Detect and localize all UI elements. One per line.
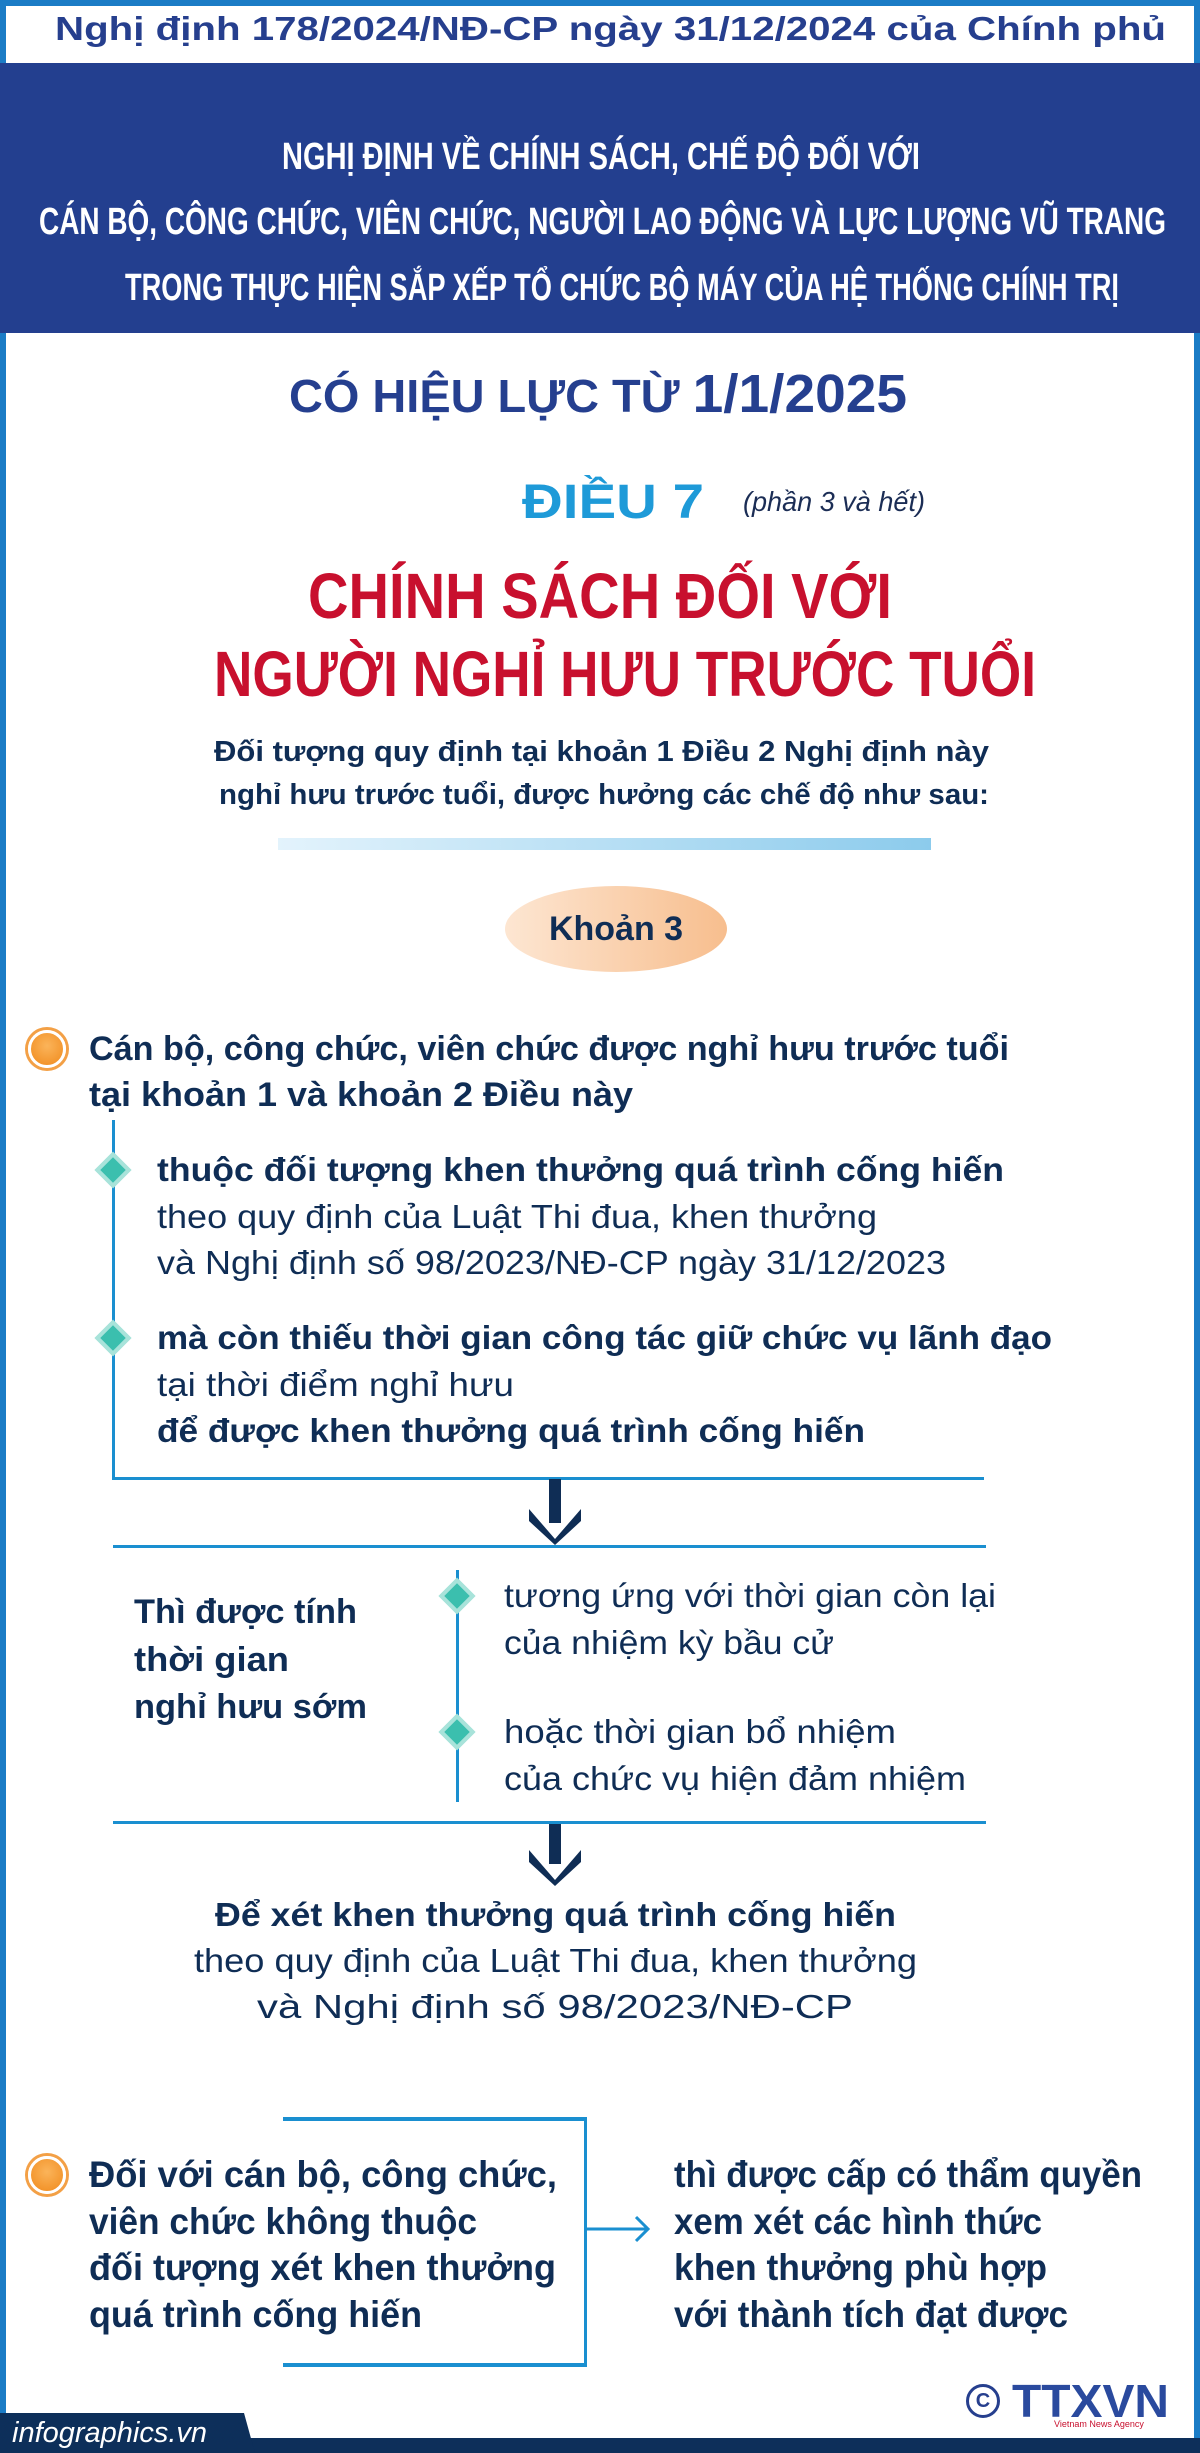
- bullet 2: [25, 2153, 557, 2335]
- effective date: CÓ HIỆU LỰC TỪ 1/1/2025: [289, 364, 907, 424]
- icon: orange dot: [28, 1030, 66, 1068]
- footer label: [0, 2413, 251, 2448]
- sub-item 1: và Nghị định số 98/2023/NĐ-CP ngày 31/12/2023: [157, 1244, 946, 1281]
- option 2: [438, 1713, 966, 1797]
- top title: Nghị định 178/2024/NĐ-CP ngày 31/12/2024 của Chính phủ: [55, 10, 1166, 47]
- header line 2: CÁN BỘ, CÔNG CHỨC, VIÊN CHỨC, NGƯỜI LAO ĐỘNG VÀ LỰC LƯỢNG VŨ TRANG: [39, 201, 1166, 243]
- result text: theo quy định của Luật Thi đua, khen thưởng: [194, 1942, 917, 1979]
- logo TTXVN: Vietnam News Agency: [1054, 2419, 1144, 2429]
- icon: diamond: [439, 1714, 475, 1750]
- option 2: của chức vụ hiện đảm nhiệm: [504, 1760, 966, 1797]
- result 2: xem xét các hình thức: [674, 2201, 1042, 2242]
- bullet 2: quá trình cống hiến: [89, 2294, 422, 2335]
- early retirement label: Thì được tính: [134, 1593, 357, 1631]
- footer bar: [0, 2438, 1200, 2453]
- intro text: nghỉ hưu trước tuổi, được hưởng các chế độ như sau:: [219, 779, 989, 811]
- red title: CHÍNH SÁCH ĐỐI VỚI: [308, 560, 892, 632]
- option 1: tương ứng với thời gian còn lại: [504, 1577, 996, 1614]
- bullet 1: [25, 1027, 1009, 1114]
- sub-item 1: thuộc đối tượng khen thưởng quá trình cống hiến: [157, 1151, 1004, 1188]
- result text: và Nghị định số 98/2023/NĐ-CP: [257, 1988, 853, 2025]
- bullet 2: viên chức không thuộc: [89, 2201, 477, 2242]
- gradient bar: [278, 838, 931, 850]
- bullet 2: đối tượng xét khen thưởng: [89, 2247, 556, 2288]
- arrow right: [587, 2216, 650, 2242]
- sub-item 2: mà còn thiếu thời gian công tác giữ chức vụ lãnh đạo: [157, 1319, 1052, 1356]
- option 1: [438, 1577, 996, 1661]
- result 2: [674, 2154, 1142, 2335]
- bullet 1: tại khoản 1 và khoản 2 Điều này: [89, 1076, 633, 1114]
- logo TTXVN: TTXVN: [1012, 2375, 1169, 2427]
- footer label: infographics.vn: [12, 2417, 207, 2449]
- icon: diamond: [95, 1320, 131, 1356]
- intro text: Đối tượng quy định tại khoản 1 Điều 2 Nghị định này: [214, 736, 989, 768]
- early retirement label: nghỉ hưu sớm: [134, 1688, 367, 1726]
- header line 3: TRONG THỰC HIỆN SẮP XẾP TỔ CHỨC BỘ MÁY CỦA HỆ THỐNG CHÍNH TRỊ: [125, 267, 1119, 309]
- sub-item 2: tại thời điểm nghỉ hưu: [157, 1366, 514, 1403]
- article note: (phần 3 và hết): [743, 486, 925, 517]
- result 2: với thành tích đạt được: [674, 2294, 1068, 2335]
- article number: ĐIỀU 7: [522, 476, 704, 529]
- red title: [214, 560, 1036, 710]
- intro text: [214, 736, 989, 811]
- pill: Khoản 3: [505, 886, 727, 972]
- icon: diamond: [439, 1578, 475, 1614]
- vertical line 2: [456, 1570, 459, 1802]
- sub-item 2: [94, 1319, 1052, 1449]
- bullet 1: Cán bộ, công chức, viên chức được nghỉ hưu trước tuổi: [89, 1030, 1009, 1068]
- header band: [0, 63, 1200, 333]
- result text: [194, 1896, 917, 2025]
- arrow down 1: [529, 1479, 581, 1545]
- result 2: thì được cấp có thẩm quyền: [674, 2154, 1142, 2195]
- option 1: của nhiệm kỳ bầu cử: [504, 1624, 834, 1661]
- pill: Khoản 3: Khoản 3: [549, 910, 683, 948]
- logo TTXVN: C: [976, 2390, 990, 2412]
- result 2: khen thưởng phù hợp: [674, 2247, 1047, 2288]
- early retirement label: [134, 1593, 367, 1726]
- arrow down 2: [529, 1824, 581, 1886]
- sub-item 1: theo quy định của Luật Thi đua, khen thưởng: [157, 1198, 877, 1235]
- option 2: hoặc thời gian bổ nhiệm: [504, 1713, 896, 1750]
- bullet 2: Đối với cán bộ, công chức,: [89, 2154, 557, 2195]
- sub-item 1: [94, 1151, 1004, 1281]
- red title: NGƯỜI NGHỈ HƯU TRƯỚC TUỔI: [214, 638, 1036, 710]
- bracket 2: [283, 2117, 587, 2121]
- sub-item 2: để được khen thưởng quá trình cống hiến: [157, 1412, 865, 1449]
- icon: orange dot: [28, 2156, 66, 2194]
- bracket 1 lines: [112, 1120, 115, 1480]
- early retirement label: thời gian: [134, 1641, 289, 1679]
- result text: Để xét khen thưởng quá trình cống hiến: [215, 1896, 896, 1933]
- icon: diamond: [95, 1152, 131, 1188]
- header line 1: NGHỊ ĐỊNH VỀ CHÍNH SÁCH, CHẾ ĐỘ ĐỐI VỚI: [282, 136, 920, 178]
